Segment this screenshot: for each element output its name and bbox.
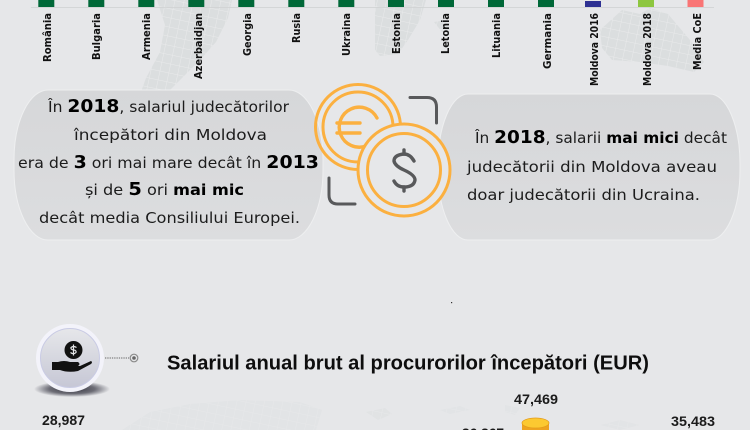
country labels: Rusia (290, 13, 303, 43)
decorative dot (451, 302, 452, 303)
country labels: Moldova 2016 (588, 13, 601, 86)
country labels: Media CoE (691, 13, 704, 70)
panel: left text callout (14, 90, 323, 240)
value labels: 28,987 (42, 413, 85, 428)
panel: left text callout: și de 5 ori mai mic (85, 179, 244, 200)
value labels: 47,469 (514, 392, 558, 407)
world map background (122, 0, 704, 430)
panel: left text callout: era de 3 ori mai mare decât în 2013 (18, 152, 319, 173)
country labels: România (41, 13, 54, 62)
country labels: Germania (541, 13, 554, 69)
panel: right text callout: judecătorii din Moldova aveau (466, 158, 717, 176)
panel: left text callout: În 2018, salariul judecătorilor (47, 96, 290, 117)
country labels: Letonia (439, 13, 452, 54)
panel: right text callout: În 2018, salarii mai mici decât (474, 127, 727, 148)
country labels: Georgia (241, 13, 254, 56)
panel: right text callout (438, 94, 740, 240)
panel: left text callout: începători din Moldova (73, 126, 267, 144)
panel: left text callout: decât media Consiliului Europei. (39, 209, 300, 227)
country labels (41, 13, 704, 86)
country labels: Armenia (140, 13, 153, 60)
bars (31, 0, 714, 8)
bar chart: judges' salaries (cropped top) (31, 0, 714, 86)
heading: prosecutors' salary: Salariul anual brut al procurorilor începători (EUR) (167, 352, 649, 374)
connector with target dot (105, 354, 138, 362)
icon: euro and dollar coins (316, 84, 450, 216)
country labels: Azerbaidjan (192, 13, 205, 79)
country labels: Moldova 2018 (641, 13, 654, 86)
panel: right text callout: doar judecătorii din Ucraina. (467, 186, 700, 204)
country labels: Lituania (490, 13, 503, 58)
icon: hand holding coin (34, 324, 110, 397)
country labels: Ukraina (340, 13, 353, 56)
country labels: Bulgaria (90, 13, 103, 60)
icon: gold coin stack (522, 418, 549, 430)
country labels: Estonia (390, 13, 403, 54)
value labels: 35,483 (671, 414, 716, 429)
value labels (42, 392, 716, 430)
